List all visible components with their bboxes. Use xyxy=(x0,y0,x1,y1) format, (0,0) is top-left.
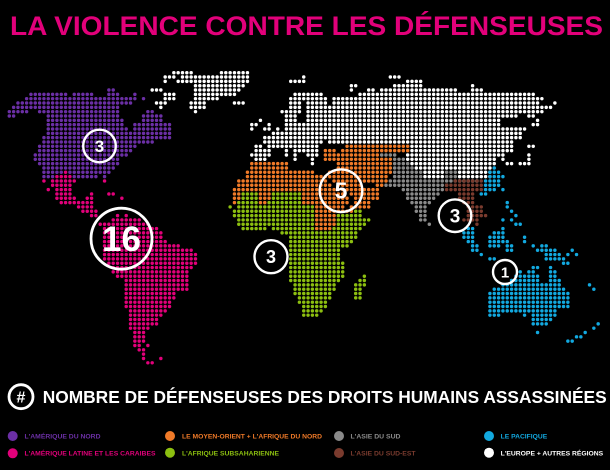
marker: North America 3 xyxy=(83,130,116,162)
legend item: Middle East xyxy=(165,431,322,441)
marker: Sub-Saharan Africa 3 xyxy=(254,240,288,273)
marker: Middle East 5 xyxy=(320,169,362,212)
region: Pacific xyxy=(464,168,598,341)
region: Latin America and the Caribbean xyxy=(44,172,196,363)
legend item: Pacific xyxy=(484,431,548,441)
marker: Southeast Asia 3: 3 xyxy=(450,206,460,228)
region: North America xyxy=(9,90,170,177)
region: Sub-Saharan Africa xyxy=(230,194,369,315)
legend item: North America xyxy=(8,431,101,441)
legend item: Southeast Asia: L'ASIE DU SUD-EST xyxy=(350,450,416,458)
region: Southeast Asia xyxy=(447,181,486,224)
legend item: Europe xyxy=(484,448,604,458)
legend item: South Asia xyxy=(334,431,401,441)
region: Middle East and North Africa xyxy=(234,146,408,229)
marker: North America 3: 3 xyxy=(95,137,104,156)
legend item: Sub-Saharan Africa xyxy=(165,448,280,458)
marker: Pacific 1: 1 xyxy=(501,264,509,281)
dot map of the world xyxy=(9,73,598,363)
region: South Asia xyxy=(382,155,455,224)
legend item: Latin America xyxy=(8,448,156,458)
legend item: Europe: L'EUROPE + AUTRES RÉGIONS xyxy=(501,448,604,458)
region: Europe and other regions xyxy=(152,73,555,181)
marker: Sub-Saharan Africa 3: 3 xyxy=(266,247,276,267)
marker: Latin America 16 xyxy=(91,208,152,269)
marker: Latin America 16: 16 xyxy=(102,220,141,259)
marker: Pacific 1 xyxy=(493,260,517,284)
legend item: Southeast Asia xyxy=(334,448,416,458)
legend heading with hash icon: NOMBRE DE DÉFENSEUSES DES DROITS HUMAINS ASSASSINÉES xyxy=(43,386,607,407)
marker: Southeast Asia 3 xyxy=(439,199,471,232)
title: LA VIOLENCE CONTRE LES DÉFENSEUSES xyxy=(10,11,603,41)
legend heading with hash icon: # xyxy=(17,390,26,406)
legend item: Sub-Saharan Africa: L'AFRIQUE SUBSAHARIENNE xyxy=(182,450,280,458)
legend item: South Asia: L'ASIE DU SUD xyxy=(350,434,401,440)
legend item: Middle East: LE MOYEN-ORIENT + L'AFRIQUE DU NORD xyxy=(182,434,322,440)
legend item: North America: L'AMÉRIQUE DU NORD xyxy=(24,432,101,440)
marker: Middle East 5: 5 xyxy=(335,178,348,204)
legend item: Pacific: LE PACIFIQUE xyxy=(501,434,548,440)
legend xyxy=(8,431,604,458)
legend item: Latin America: L'AMÉRIQUE LATINE ET LES CARAIBES xyxy=(24,448,156,458)
